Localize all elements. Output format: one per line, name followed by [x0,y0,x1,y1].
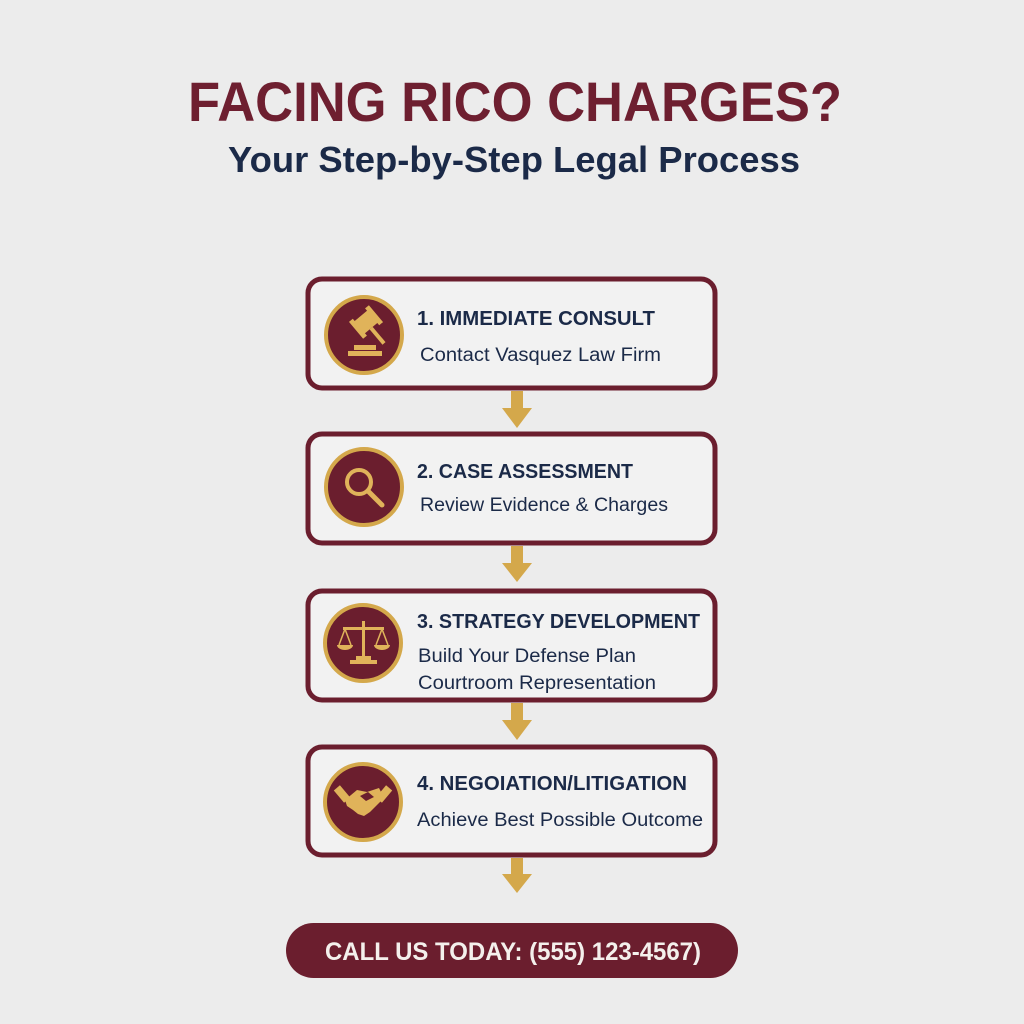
step 1 text: Contact Vasquez Law Firm [420,345,661,366]
step 3 panel [308,591,715,700]
step 2 text: Review Evidence & Charges [420,495,668,516]
arrow 4 [502,858,532,893]
icon: scales of justice [325,605,401,681]
arrow 2 [502,546,532,582]
title: FACING RICO CHARGES? [188,70,842,133]
step 2 panel [308,434,715,543]
call to action button [286,923,738,978]
arrow 1 [502,391,532,428]
icon: handshake [325,764,401,840]
step 1 panel [308,279,715,388]
icon: magnifying glass [326,449,402,525]
step 3 text: Build Your Defense Plan [418,646,636,667]
step 4 heading: 4. NEGOIATION/LITIGATION [417,773,687,795]
step 3 heading: 3. STRATEGY DEVELOPMENT [417,611,700,633]
subtitle: Your Step-by-Step Legal Process [228,139,800,180]
icon: gavel [326,297,402,373]
step 1 heading: 1. IMMEDIATE CONSULT [417,308,655,330]
step 2 heading: 2. CASE ASSESSMENT [417,461,633,483]
step 3 text line 2: Courtroom Representation [418,673,656,694]
call to action button: CALL US TODAY: (555) 123-4567) [325,938,701,966]
step 4 text: Achieve Best Possible Outcome [417,810,703,831]
arrow 3 [502,703,532,740]
step 4 panel [308,747,715,855]
